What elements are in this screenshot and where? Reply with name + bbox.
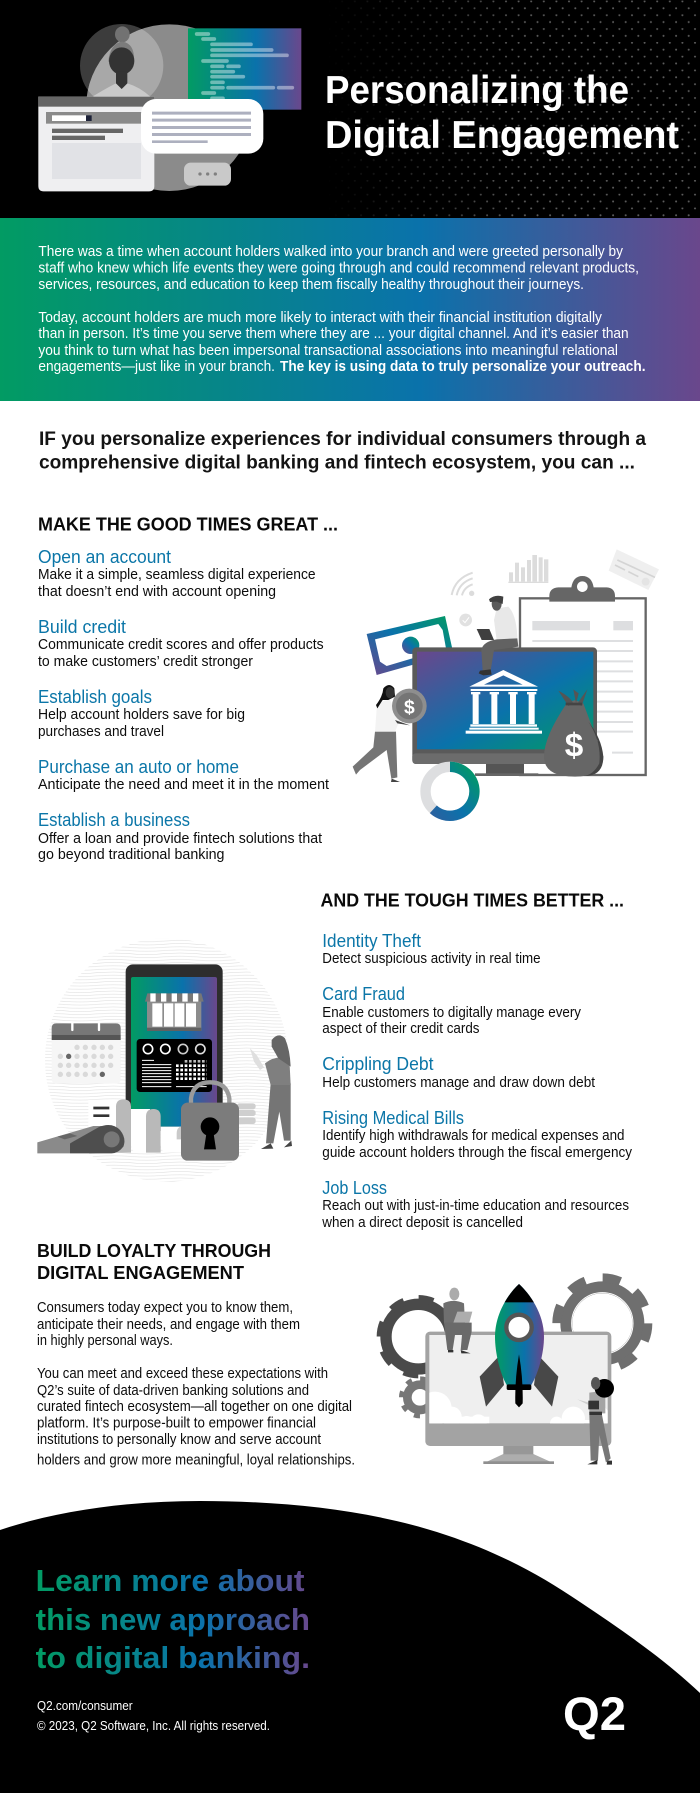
item: open an account bbox=[38, 547, 316, 600]
item: rising medical bills: Rising Medical Bills bbox=[322, 1108, 464, 1128]
item: rising medical bills: Identify high withdrawals for medical expenses and bbox=[322, 1128, 624, 1144]
paragraph two: institutions to personally know and serve account bbox=[37, 1432, 321, 1448]
footer url and copyright: © 2023, Q2 Software, Inc. All rights reserved. bbox=[37, 1719, 270, 1733]
footer url and copyright: Q2.com/consumer bbox=[37, 1699, 133, 1713]
item: card fraud: Card Fraud bbox=[322, 984, 405, 1004]
intro paragraph two: engagements—just like in your branch. bbox=[38, 359, 275, 375]
rocket bbox=[480, 1282, 558, 1407]
item: establish a business bbox=[38, 810, 322, 863]
item: crippling debt: Crippling Debt bbox=[322, 1054, 434, 1074]
illustration: digital banking monitor bbox=[353, 549, 659, 816]
figure: man on monitor bbox=[443, 1288, 472, 1353]
illustration: rocket launch bbox=[381, 1278, 648, 1465]
icon: small gear bbox=[402, 1379, 438, 1416]
paragraph two: curated fintech ecosystem—all together on one digital bbox=[37, 1399, 352, 1415]
section: tough times bbox=[320, 890, 633, 1231]
circle backdrop bbox=[80, 24, 253, 191]
item: identity theft: Detect suspicious activity in real time bbox=[322, 951, 541, 967]
intro paragraph one: There was a time when account holders walked into your branch and were greeted personally by bbox=[38, 244, 624, 260]
intro paragraph one bbox=[38, 244, 639, 293]
item: build credit bbox=[38, 617, 324, 670]
item: establish a business: Offer a loan and provide fintech solutions that bbox=[38, 831, 322, 847]
item: identity theft bbox=[322, 931, 541, 967]
footer black curve bbox=[0, 1501, 700, 1793]
paragraph two: platform. It’s purpose-built to empower financial bbox=[37, 1416, 316, 1432]
typing bubble bbox=[184, 163, 231, 186]
intro paragraph two: you think to turn what has been impersonal transactional associations into meaningful relational bbox=[38, 343, 618, 359]
calendar bbox=[52, 1023, 121, 1083]
person silhouette bbox=[93, 26, 150, 96]
wavy circle backdrop bbox=[45, 938, 288, 1182]
item: open an account: Open an account bbox=[38, 547, 171, 567]
item: job loss: when a direct deposit is cancelled bbox=[321, 1215, 523, 1231]
icon: money bag bbox=[544, 689, 603, 777]
browser window bbox=[38, 97, 154, 191]
icon: dark gear bbox=[381, 1299, 456, 1374]
intro paragraph two: The key is using data to truly personalize your outreach. bbox=[280, 359, 646, 375]
intro paragraph two bbox=[38, 310, 645, 375]
icon: coins bbox=[237, 1103, 256, 1124]
section: good times bbox=[38, 514, 338, 863]
smartphone bbox=[126, 964, 223, 1131]
banknote bbox=[367, 616, 453, 675]
intro paragraph two: Today, account holders are much more likely to interact with their financial institution digitally bbox=[38, 310, 603, 326]
call to action bbox=[36, 1563, 310, 1675]
donut chart bbox=[425, 767, 474, 816]
intro gradient panel bbox=[0, 218, 700, 401]
item: build credit: to make customers’ credit stronger bbox=[38, 654, 253, 670]
item: purchase an auto or home: Purchase an auto or home bbox=[38, 757, 239, 777]
item: establish a business: go beyond traditional banking bbox=[38, 847, 224, 863]
item: purchase an auto or home: Anticipate the need and meet it in the moment bbox=[38, 777, 329, 793]
item: identity theft: Identity Theft bbox=[322, 931, 421, 951]
chat bubble bbox=[141, 99, 263, 154]
item: purchase an auto or home bbox=[38, 757, 329, 793]
paragraph two: Q2’s suite of data-driven banking solutions and bbox=[37, 1383, 309, 1399]
section heading: DIGITAL ENGAGEMENT bbox=[37, 1262, 245, 1283]
clipboard bbox=[520, 576, 646, 775]
monitor bbox=[412, 647, 597, 776]
item: card fraud bbox=[322, 984, 582, 1037]
item: job loss bbox=[321, 1178, 629, 1231]
dashboard panel bbox=[137, 1039, 212, 1092]
receipt printer bbox=[37, 1125, 124, 1153]
title: Personalizing the bbox=[325, 69, 629, 112]
icon: padlock bbox=[181, 1082, 239, 1161]
paragraph two bbox=[37, 1366, 355, 1468]
section heading: MAKE THE GOOD TIMES GREAT ... bbox=[38, 514, 338, 534]
intro paragraph one: services, resources, and education to keep them fiscally healthy throughout their journeys. bbox=[38, 277, 584, 293]
item: rising medical bills bbox=[322, 1108, 633, 1161]
title: Digital Engagement bbox=[325, 114, 679, 157]
paragraph two: You can meet and exceed these expectations with bbox=[37, 1366, 328, 1382]
call to action: Learn more about bbox=[36, 1563, 304, 1598]
section heading: BUILD LOYALTY THROUGH bbox=[37, 1240, 271, 1261]
figure: woman presenting bbox=[577, 1377, 614, 1465]
icon: wifi bbox=[452, 573, 474, 596]
item: build credit: Build credit bbox=[38, 617, 126, 637]
section heading: AND THE TOUGH TIMES BETTER ... bbox=[320, 890, 624, 910]
icon: storefront bbox=[145, 993, 204, 1031]
paragraph one bbox=[37, 1300, 300, 1349]
section: build loyalty bbox=[37, 1240, 355, 1468]
paragraph two: holders and grow more meaningful, loyal relationships. bbox=[37, 1452, 355, 1468]
item: establish goals bbox=[38, 687, 245, 740]
icon: bank building bbox=[466, 670, 542, 734]
figure: woman on right bbox=[250, 1035, 292, 1149]
item: crippling debt bbox=[322, 1054, 595, 1091]
intro paragraph one: staff who knew which life events they were going through and could recommend relevant products, bbox=[38, 260, 639, 276]
item: establish a business: Establish a business bbox=[38, 810, 190, 830]
call to action: this new approach bbox=[36, 1602, 310, 1637]
footer url and copyright bbox=[37, 1699, 270, 1733]
item: job loss: Reach out with just-in-time education and resources bbox=[322, 1198, 629, 1214]
figure: man with laptop bbox=[477, 596, 518, 675]
item: build credit: Communicate credit scores and offer products bbox=[38, 637, 324, 653]
icon: check mark bbox=[459, 614, 472, 626]
item: rising medical bills: guide account holders through the fiscal emergency bbox=[322, 1145, 633, 1161]
title bbox=[325, 69, 679, 157]
call to action: to digital banking. bbox=[36, 1640, 310, 1675]
figure: woman carrying coin bbox=[353, 685, 427, 782]
code panel bbox=[188, 28, 301, 110]
item: establish goals: Help account holders save for big bbox=[38, 707, 245, 723]
item: job loss: Job Loss bbox=[322, 1178, 387, 1198]
paragraph one: anticipate their needs, and engage with them bbox=[37, 1317, 300, 1333]
icon: credit card bbox=[609, 549, 659, 590]
lead-in heading: IF you personalize experiences for individual consumers through a bbox=[39, 428, 646, 450]
paragraph one: in highly personal ways. bbox=[37, 1333, 173, 1349]
item: card fraud: aspect of their credit cards bbox=[322, 1021, 480, 1037]
section heading bbox=[37, 1240, 271, 1283]
item: open an account: that doesn’t end with account opening bbox=[38, 584, 276, 600]
icon: large gear bbox=[557, 1278, 648, 1369]
Q2 logo: Q2 bbox=[563, 1687, 626, 1740]
item: open an account: Make it a simple, seamless digital experience bbox=[38, 567, 316, 583]
header band bbox=[0, 0, 700, 218]
paragraph one: Consumers today expect you to know them, bbox=[37, 1300, 293, 1316]
lead-in heading: comprehensive digital banking and fintech ecosystem, you can ... bbox=[39, 452, 635, 474]
item: establish goals: Establish goals bbox=[38, 687, 152, 707]
item: crippling debt: Help customers manage and draw down debt bbox=[322, 1075, 595, 1091]
intro paragraph two: than in person. It’s time you serve them where they are ... your digital channel. And it’s easier than bbox=[38, 326, 629, 342]
desktop monitor bbox=[418, 1332, 611, 1464]
lead-in heading bbox=[39, 428, 646, 474]
item: card fraud: Enable customers to digitally manage every bbox=[322, 1005, 582, 1021]
illustration: mobile security bbox=[37, 938, 292, 1182]
hero illustration: personalized digital profile bbox=[38, 24, 301, 191]
figure: woman carrying coin: $ bbox=[404, 697, 415, 718]
receipt paper bbox=[88, 1099, 192, 1153]
item: establish goals: purchases and travel bbox=[38, 724, 164, 740]
icon: bar chart bbox=[508, 555, 548, 583]
icon: money bag: $ bbox=[565, 728, 584, 765]
